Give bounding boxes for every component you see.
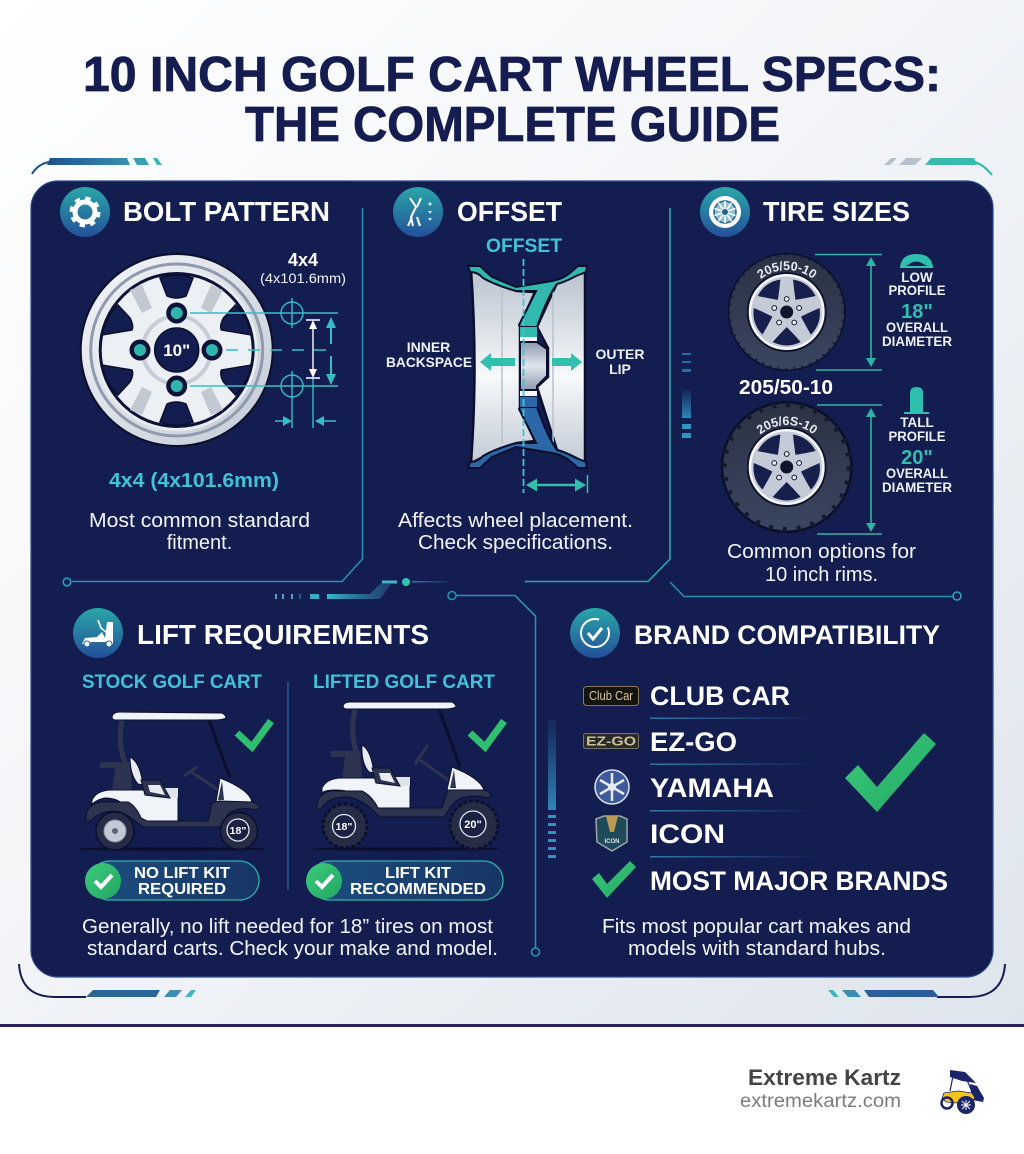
label: tall profile: PROFILE xyxy=(888,429,946,444)
label: tall profile: DIAMETER xyxy=(882,480,952,495)
heading: lift requirements: LIFT REQUIREMENTS xyxy=(137,619,429,650)
heading: offset: OFFSET xyxy=(457,196,562,227)
tire: low profile xyxy=(728,253,846,371)
arrow: offset dimension xyxy=(526,475,588,493)
arrow: inner xyxy=(480,353,515,371)
tire size label: 205/50-10 xyxy=(739,376,833,399)
text: lift description xyxy=(82,916,498,960)
brand: icon: ICON xyxy=(650,819,725,849)
dimension arrows xyxy=(815,254,882,534)
text: brand description xyxy=(602,916,911,960)
label: low profile: 18" xyxy=(901,301,933,323)
icon: cart xyxy=(73,608,123,658)
brand: ez-go: EZ-GO xyxy=(650,727,737,757)
icon: tire xyxy=(700,187,750,237)
icon: large check xyxy=(845,733,936,812)
icon: low profile arch xyxy=(900,254,933,268)
bottom left decoration xyxy=(19,964,196,997)
column divider xyxy=(287,682,289,890)
bottom right decoration xyxy=(828,964,1005,997)
brand list dividers xyxy=(650,718,820,858)
icon: gear xyxy=(60,187,110,237)
brand: club car: CLUB CAR xyxy=(650,681,790,711)
brand: yamaha: YAMAHA xyxy=(650,773,774,803)
text: bolt pattern description xyxy=(89,510,310,554)
icon: lifted check xyxy=(470,721,504,747)
heading: brand compatibility: BRAND COMPATIBILITY xyxy=(634,620,940,650)
badge: no lift kit required xyxy=(85,861,259,900)
label: low profile xyxy=(882,270,952,349)
icon: offset profile xyxy=(393,187,443,237)
text: lift description: Generally, no lift needed for 18” tires on most xyxy=(82,916,493,938)
label: tall profile xyxy=(882,415,952,495)
text: bolt pattern description: Most common standard xyxy=(89,510,310,532)
badge: no lift kit required: NO LIFT KIT xyxy=(134,865,231,882)
text: offset description: Affects wheel placement. xyxy=(398,510,633,532)
sub-heading: lifted golf cart: LIFTED GOLF CART xyxy=(313,672,495,693)
vertical decoration brand side xyxy=(548,720,556,858)
text: bolt pattern description: fitment. xyxy=(167,532,232,554)
circuit connectors xyxy=(63,208,961,956)
label: 4x4 dimension xyxy=(260,250,346,286)
logo: icon xyxy=(596,816,627,851)
panel: lift requirements xyxy=(73,608,504,960)
text: tire sizes description xyxy=(727,541,916,586)
label: 4x4 dimension: 4x4 xyxy=(288,250,318,270)
footer text: Extreme Kartz xyxy=(748,1065,901,1090)
badge: lift kit recommended: RECOMMENDED xyxy=(350,881,486,898)
label: inner backspace: INNER xyxy=(407,339,450,355)
tire: tall profile: 205/6S-10 xyxy=(756,416,817,434)
label: tall profile: TALL xyxy=(900,415,934,430)
label: outer lip xyxy=(596,346,644,377)
label: offset: OFFSET xyxy=(486,236,562,257)
main navy panel xyxy=(31,181,993,977)
heading: tire sizes: TIRE SIZES xyxy=(763,196,910,227)
title xyxy=(83,48,941,152)
title: 10 INCH GOLF CART WHEEL SPECS: xyxy=(83,48,941,102)
label: inner backspace xyxy=(386,339,472,370)
dashed centre line xyxy=(522,259,524,493)
wheel illustration: 10" xyxy=(163,341,190,360)
brand: most major brands: MOST MAJOR BRANDS xyxy=(650,866,948,896)
tire: low profile: 205/50-10 xyxy=(757,261,816,279)
text: brand description: Fits most popular cart makes and xyxy=(602,916,911,938)
illustration: stock golf cart xyxy=(77,712,267,851)
text: offset description xyxy=(398,510,633,554)
logo: club car xyxy=(584,686,638,706)
label: low profile: DIAMETER xyxy=(882,334,952,349)
top right decoration xyxy=(884,158,992,175)
label: inner backspace: BACKSPACE xyxy=(386,354,472,370)
text: lift description: standard carts. Check your make and model. xyxy=(87,938,498,960)
icon: tall profile xyxy=(904,387,929,414)
panel: tire sizes xyxy=(700,187,952,586)
wheel illustration xyxy=(80,253,274,447)
badge: no lift kit required: REQUIRED xyxy=(138,881,226,898)
badge: lift kit recommended xyxy=(306,861,503,900)
text: brand description: models with standard hubs. xyxy=(628,938,886,960)
label: outer lip: OUTER xyxy=(596,346,644,362)
footer text: extremekartz.com xyxy=(740,1091,901,1112)
small dash decoration centre xyxy=(275,583,392,599)
icon: check circle xyxy=(570,608,620,658)
title: THE COMPLETE GUIDE xyxy=(245,98,780,152)
icon: small check xyxy=(592,861,636,898)
bolt spacing diagram xyxy=(190,298,338,428)
text: tire sizes description: Common options for xyxy=(727,541,916,563)
illustration: lifted golf cart xyxy=(311,702,501,851)
label: low profile: LOW xyxy=(901,270,933,285)
label: low profile: OVERALL xyxy=(886,320,948,335)
panel: brand compatibility xyxy=(570,608,948,960)
vertical decoration tire side xyxy=(682,353,691,438)
badge: lift kit recommended: LIFT KIT xyxy=(385,865,452,882)
label: low profile: PROFILE xyxy=(888,283,946,298)
tire: tall profile xyxy=(720,401,853,533)
icon: footer cart logo xyxy=(942,1070,984,1114)
wheel cross-section xyxy=(468,266,587,468)
icon: stock check xyxy=(237,721,271,747)
label: 4x4 dimension: (4x101.6mm) xyxy=(260,271,346,286)
illustration: lifted golf cart: 18" xyxy=(336,821,352,833)
label: tall profile: 20" xyxy=(901,447,933,469)
footer brand xyxy=(740,1065,984,1114)
panel: offset xyxy=(386,187,644,554)
sub-heading: stock golf cart: STOCK GOLF CART xyxy=(82,672,262,693)
heading: bolt pattern: BOLT PATTERN xyxy=(123,196,330,227)
logo: club car: Club Car xyxy=(589,689,633,703)
text: offset description: Check specifications. xyxy=(418,532,613,554)
label: tall profile: OVERALL xyxy=(886,466,948,481)
logo: yamaha xyxy=(595,770,629,804)
illustration: stock golf cart: 18" xyxy=(230,825,246,837)
logo: icon: ICON xyxy=(604,839,620,845)
callout: bolt pattern value: 4x4 (4x101.6mm) xyxy=(109,469,279,492)
footer text xyxy=(740,1065,901,1112)
text: tire sizes description: 10 inch rims. xyxy=(765,564,878,586)
label: outer lip: LIP xyxy=(609,361,631,377)
illustration: lifted golf cart: 20" xyxy=(464,819,482,831)
top left decoration xyxy=(32,158,162,174)
logo: ez-go: EZ-GO xyxy=(586,734,636,748)
arrow: outer xyxy=(552,353,582,371)
panel: bolt pattern xyxy=(60,187,346,554)
